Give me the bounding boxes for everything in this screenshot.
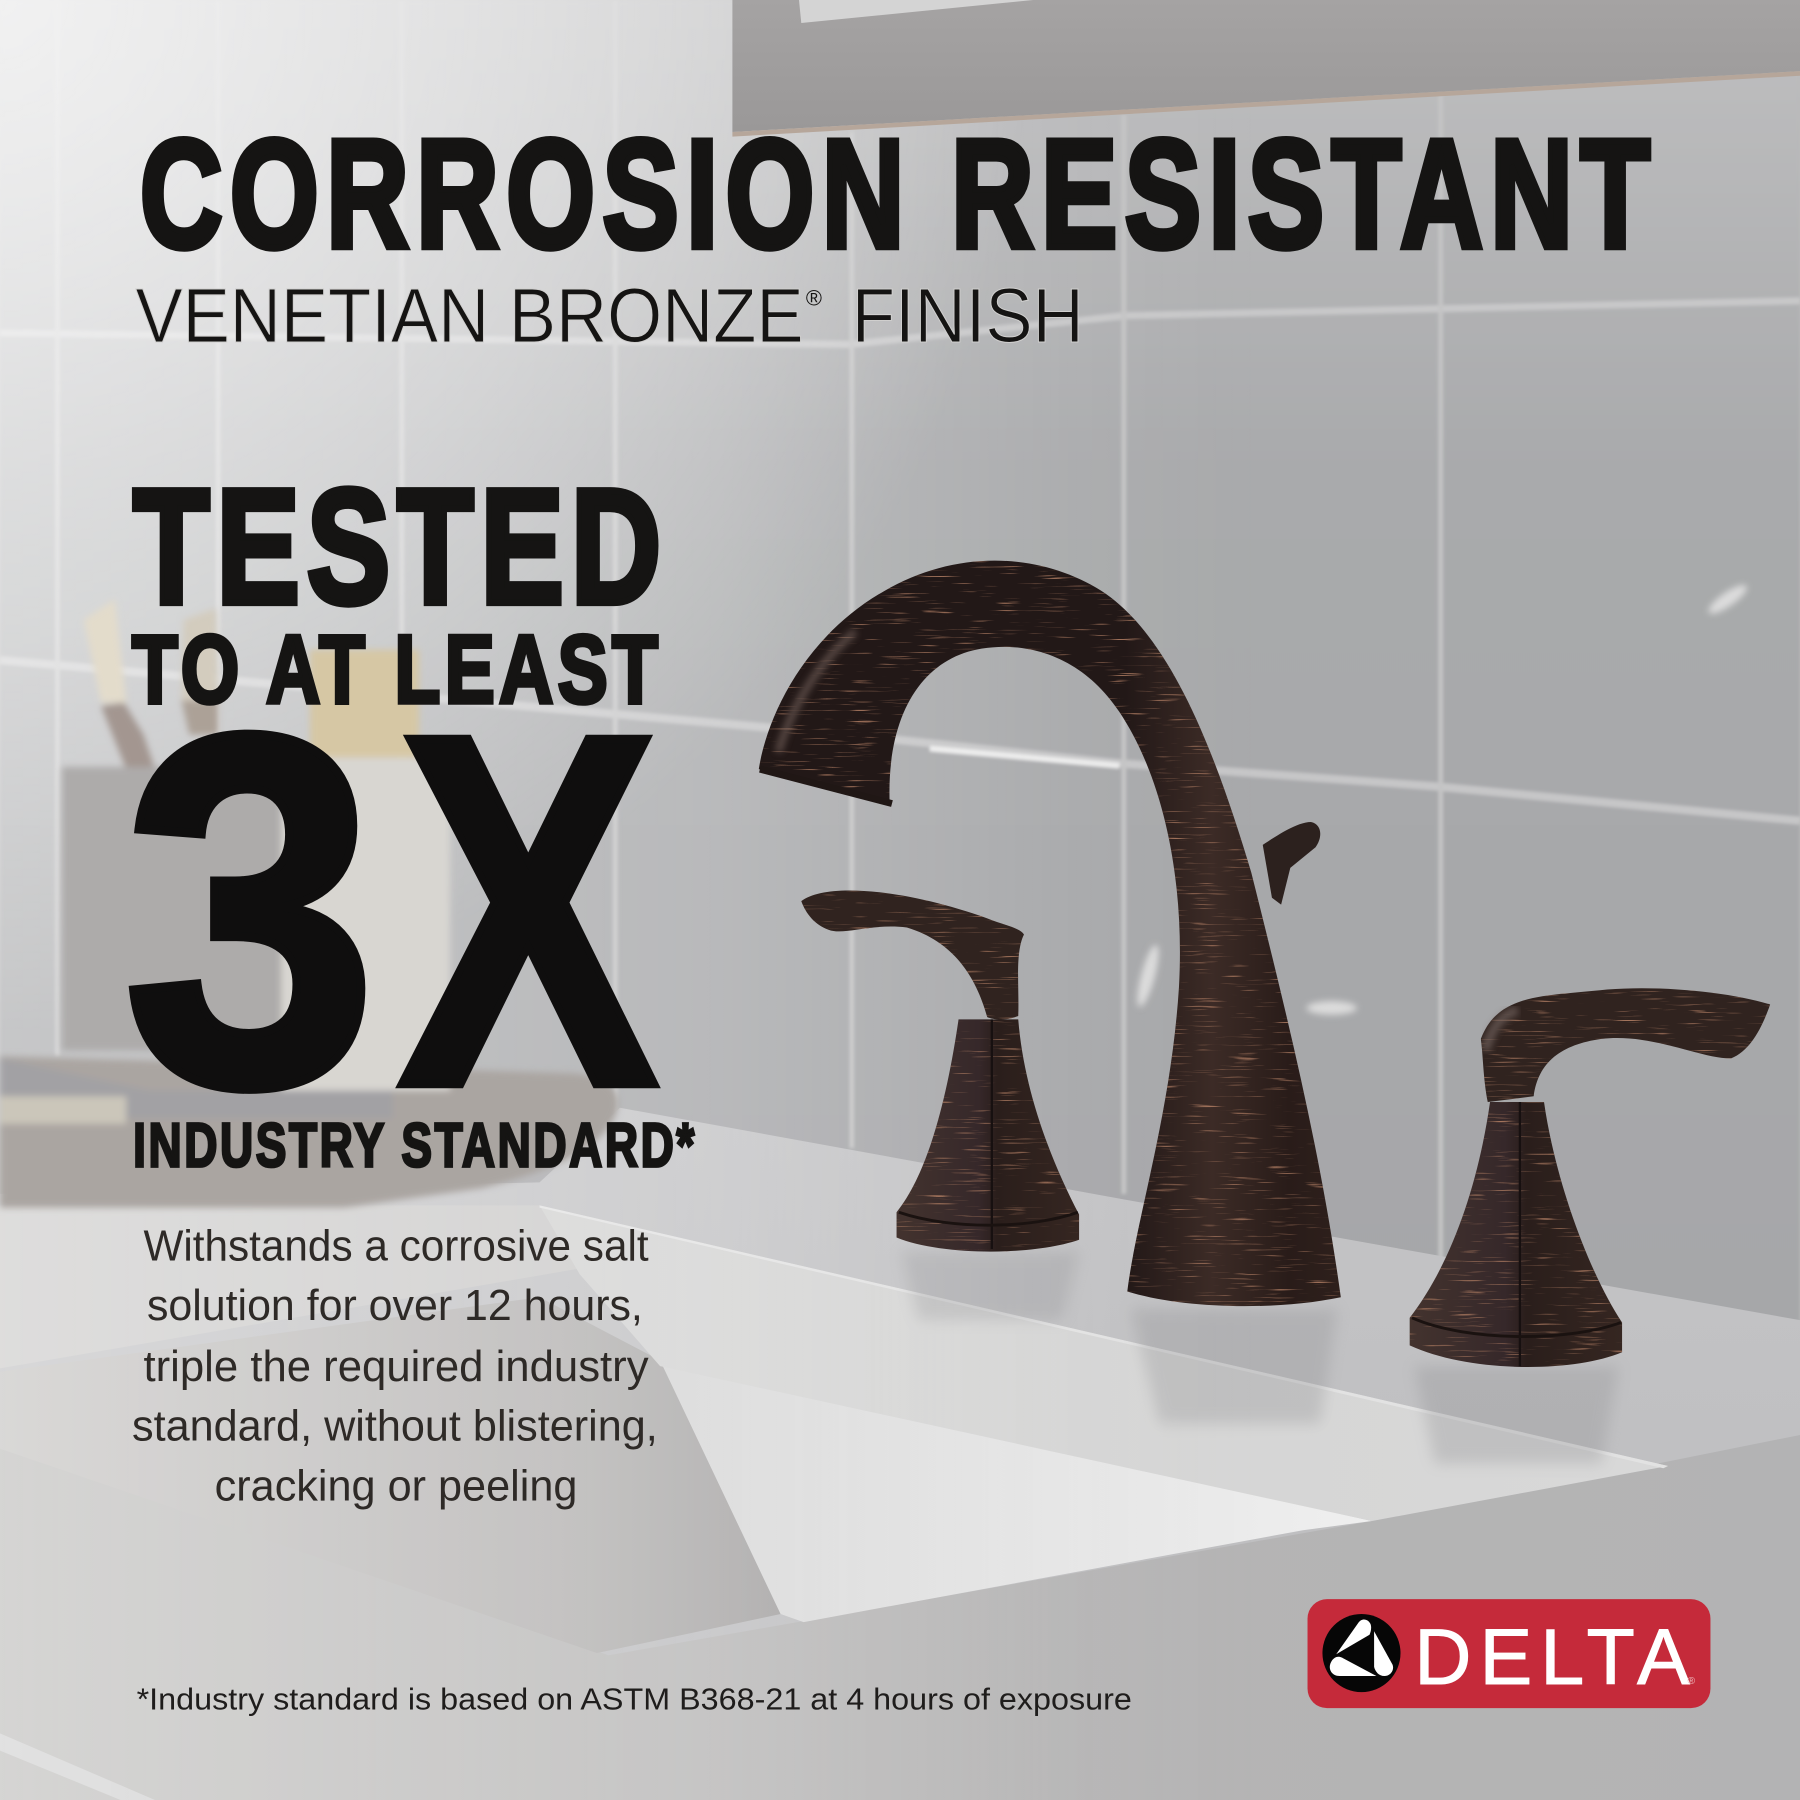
lower countertop bbox=[0, 1435, 1800, 1800]
headline: tested to at least 3X bbox=[123, 455, 697, 1191]
spout bbox=[759, 561, 1341, 1306]
wall highlights bbox=[1133, 580, 1750, 1015]
faucet reflections bbox=[901, 1251, 1619, 1464]
description text: Withstands a corrosive salt bbox=[143, 1222, 649, 1270]
subtitle: FINISH bbox=[852, 273, 1084, 359]
X: X bbox=[398, 632, 660, 1191]
counter back and top bbox=[0, 1108, 1800, 1800]
subtitle: VENETIAN BRONZE bbox=[135, 273, 804, 359]
icon: delta triangle mark bbox=[1322, 1614, 1401, 1692]
tested: TESTED bbox=[133, 455, 668, 638]
3: 3 bbox=[123, 632, 378, 1191]
cup bbox=[62, 767, 281, 1050]
pop-up lift rod bbox=[1263, 822, 1320, 905]
description text bbox=[132, 1222, 658, 1510]
description text: cracking or peeling bbox=[215, 1462, 577, 1510]
tray bbox=[0, 1056, 618, 1208]
brushed copper streaks bbox=[746, 551, 1779, 1378]
right handle lever bbox=[1481, 988, 1770, 1102]
description text: standard, without blistering, bbox=[132, 1403, 658, 1451]
makeup brush on tray bbox=[0, 1058, 393, 1124]
registered mark: ® bbox=[1688, 1676, 1696, 1687]
description text: triple the required industry bbox=[143, 1343, 649, 1391]
registered mark: ® bbox=[806, 285, 822, 310]
wordmark: DELTA bbox=[1414, 1612, 1690, 1701]
quartz counter edge bbox=[540, 1205, 1668, 1521]
description text: solution for over 12 hours, bbox=[147, 1282, 643, 1330]
upper cabinet bbox=[732, 0, 1800, 137]
sink basin right wall bbox=[660, 1360, 1372, 1622]
right handle base bbox=[1410, 1102, 1622, 1367]
left handle lever bbox=[801, 890, 1024, 1020]
left handle base bbox=[897, 1019, 1079, 1252]
bathroom items bbox=[0, 599, 618, 1208]
to at least: TO AT LEAST bbox=[132, 617, 662, 724]
left counter rim bbox=[0, 1205, 580, 1368]
sink basin left wall bbox=[0, 1297, 781, 1653]
bottle bbox=[281, 758, 450, 1091]
faucet set: venetian bronze bbox=[746, 551, 1779, 1378]
footnote: *Industry standard is based on ASTM B368-21 at 4 hours of exposure bbox=[137, 1681, 1132, 1716]
gold cap bbox=[310, 650, 419, 758]
wall tiles bbox=[0, 0, 1800, 1332]
highlights and seams bbox=[760, 631, 1621, 1366]
Delta logo bbox=[1308, 1599, 1710, 1708]
toothbrushes bbox=[84, 599, 218, 769]
industry standard: INDUSTRY STANDARD* bbox=[133, 1111, 697, 1180]
